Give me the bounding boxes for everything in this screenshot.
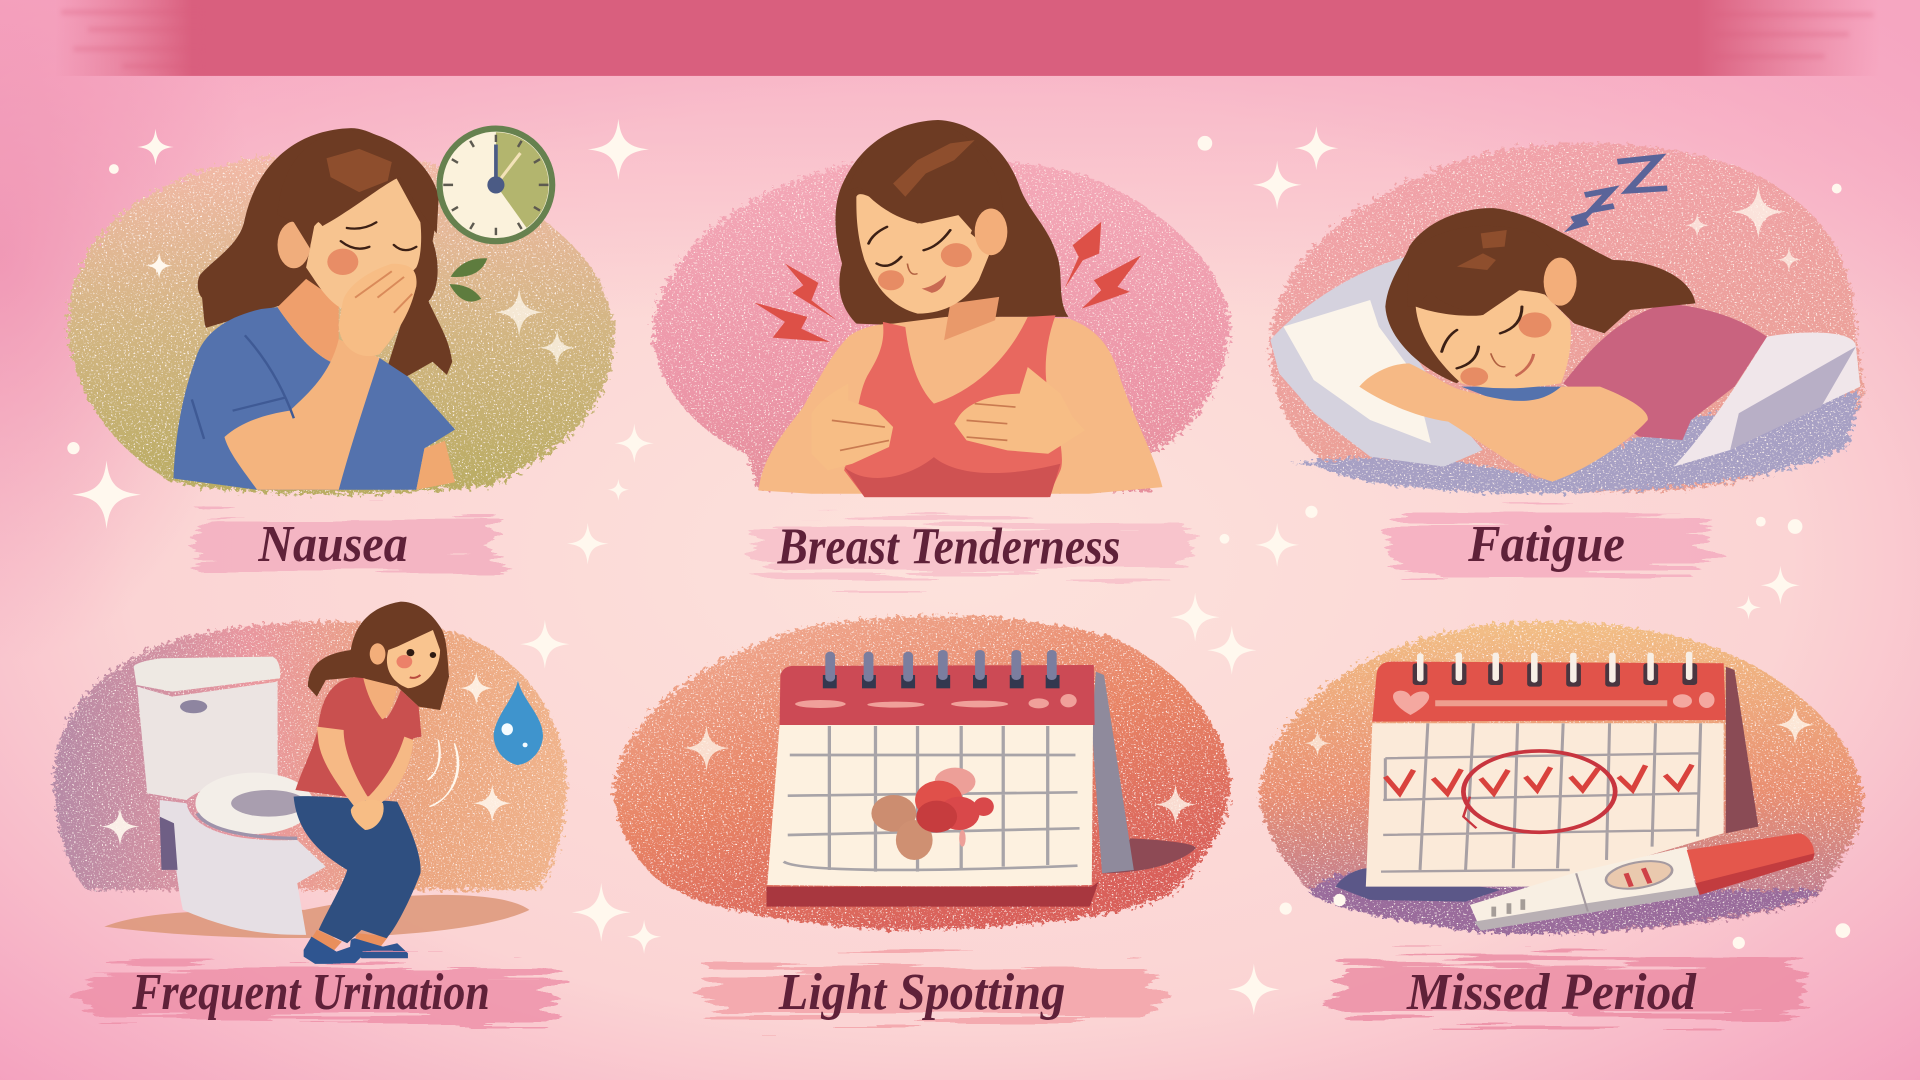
label: light spotting: [708, 964, 1158, 1021]
icon: lightning right: [1064, 222, 1141, 309]
label: frequent urination: Frequent Urination: [131, 964, 490, 1021]
icon: lightning left: [754, 264, 837, 342]
icon: pregnancy test: [1470, 833, 1815, 931]
woman sleeping: [1359, 208, 1767, 482]
calendar with checks: [1366, 652, 1758, 887]
icon: water drop: [494, 681, 543, 765]
missed period backdrop blob: [1260, 622, 1862, 934]
woman holding chest: [758, 120, 1162, 497]
panel: fatigue: [1270, 144, 1865, 493]
woman bending over: [294, 602, 449, 964]
label: fatigue: Fatigue: [1467, 516, 1625, 573]
icon: toilet: [134, 657, 326, 935]
woman with hand over mouth: [173, 128, 455, 490]
panel: nausea: [67, 128, 614, 494]
pillows: [1270, 257, 1860, 467]
label: missed period: [1335, 961, 1800, 1021]
label: nausea: Nausea: [257, 516, 408, 573]
title banner: [55, 0, 1880, 76]
icon: motion arcs: [428, 740, 459, 807]
shadow under calendar: [1309, 868, 1821, 933]
label: light spotting: Light Spotting: [778, 964, 1065, 1021]
panel: light spotting: [614, 616, 1231, 930]
urination backdrop blob: [54, 622, 567, 890]
icon: zzz: [1572, 157, 1667, 226]
tenderness backdrop blob: [652, 159, 1230, 490]
label: nausea: [193, 516, 497, 573]
panel: breast tenderness: [652, 120, 1230, 497]
icon: nausea leaves: [449, 258, 487, 302]
label: missed period: Missed Period: [1406, 964, 1697, 1021]
label: breast tenderness: Breast Tenderness: [777, 518, 1120, 575]
floor shadow: [104, 895, 529, 938]
nausea backdrop blob: [67, 153, 614, 494]
calendar with spotting: [767, 650, 1196, 907]
spotting backdrop blob: [614, 616, 1231, 930]
icon: clock: [440, 129, 552, 241]
nausea illustration: [67, 128, 614, 494]
panel: frequent urination: [54, 602, 567, 964]
spotting stain: [871, 768, 994, 860]
panel: missed period: [1260, 622, 1862, 934]
bedsheet: [1292, 390, 1860, 493]
label: fatigue: [1386, 516, 1711, 573]
fatigue backdrop blob: [1270, 144, 1865, 492]
sparkles: [67, 119, 1850, 1015]
